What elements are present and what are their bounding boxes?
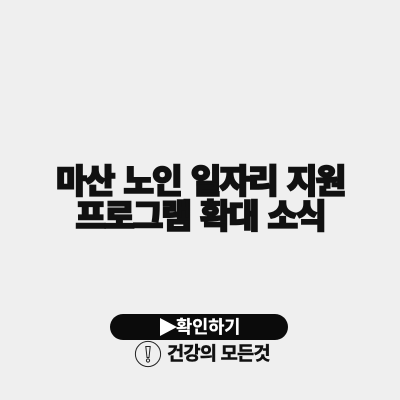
button label: 확인하기 <box>176 317 240 337</box>
brand text: 건강의 모든것 <box>167 343 270 364</box>
button: confirm <box>110 314 288 340</box>
icon: exclamation in circle <box>134 340 162 368</box>
title line 1: 마산 노인 일자리 지원 <box>56 164 344 201</box>
arrow icon <box>160 318 177 336</box>
title <box>56 164 345 236</box>
title line 2: 프로그램 확대 소식 <box>75 199 325 236</box>
